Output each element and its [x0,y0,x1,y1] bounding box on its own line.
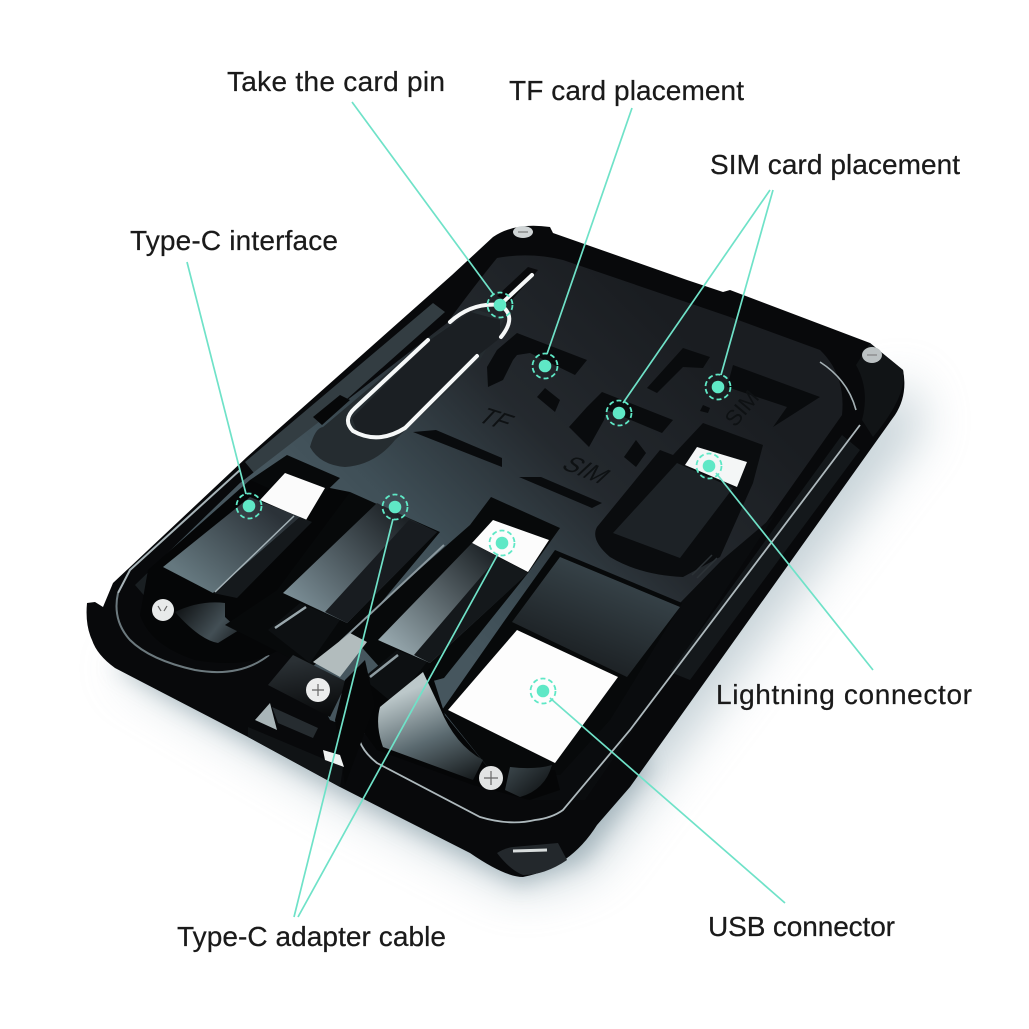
left grey gap [255,703,277,730]
dark side [325,520,437,623]
neck [268,603,340,663]
clip block [268,655,347,717]
SIM top slot [569,392,673,447]
SIM card slot [519,392,673,508]
ridges [692,555,717,578]
card tool kit body [87,226,904,877]
corner tab right [856,343,904,437]
screw centre [306,678,330,702]
first Type-C adapter cable [225,492,440,668]
line: adapter cable right [298,554,498,917]
line: USB connector [550,698,785,903]
label: Type-C adapter cable: Type-C adapter cable [177,921,446,952]
marker: cable one [382,494,408,520]
line: Lightning connector [716,473,873,670]
label: USB connector: USB connector [708,911,895,942]
recess [225,492,440,668]
marker: TF [532,354,558,378]
tiny notch [700,405,710,413]
black side slot [313,395,350,425]
drop shadow under the card [110,380,925,890]
recess [442,550,682,775]
sim pin [348,275,532,437]
corner tab bottom [497,843,567,875]
screw left [152,599,174,621]
rim highlight top right [820,362,856,410]
body [613,463,733,558]
dark side [213,517,312,598]
lobe right of screw [505,765,552,797]
lower right black cavity [340,668,560,800]
base plate [248,727,343,787]
lower left lobe [175,602,239,643]
marker: SIM right [706,374,730,400]
label: TF card placement: TF card placement [509,75,744,106]
TF top slot [487,333,587,387]
rim highlight left [118,470,240,593]
dark side [414,557,528,663]
TF card slot [413,333,587,467]
neck highlight [275,607,306,628]
white tip [685,447,747,487]
label: Lightning connector: Lightning connector [716,679,972,710]
white latch [323,750,344,767]
white tip [260,473,325,520]
recess [250,455,340,507]
slot corner [647,348,710,393]
line: SIM card placement right [721,190,773,375]
Type-C interface adapter [163,455,340,598]
SIM label: SIM [555,452,616,488]
pin loop interior [352,312,500,436]
marker: cable two [490,530,514,556]
screws [152,226,882,790]
screw top [513,226,533,238]
recess [348,497,560,690]
rim band left [135,483,256,600]
black area right of USB [530,515,775,800]
neck [363,650,427,705]
pin recess [310,310,505,467]
highlight [215,516,294,592]
black channel [335,660,375,785]
lower right lobe [378,672,483,780]
second SIM card slot [647,348,820,431]
label: Take the card pin: Take the card pin [227,66,445,97]
body [283,503,437,623]
marker: Type-C interface [236,494,262,518]
light strip [313,633,367,677]
body [378,543,528,663]
screw right [862,347,882,363]
marker: pin [488,292,512,318]
TF card lower slot [413,430,502,467]
screw bottom [479,766,503,790]
Lightning connector [595,423,763,578]
rim highlight lower right [357,425,860,822]
line: take the card pin [352,102,494,295]
slot bar [727,365,820,427]
right side rim [670,435,860,680]
white tip [472,520,549,572]
line: TF card placement [547,108,632,354]
upper body [512,557,680,677]
line: Type-C interface [187,262,246,494]
white plug [448,630,618,763]
recess [595,423,763,577]
TF key notch [537,388,560,412]
SIM label rotated: SIM [720,385,764,431]
label: Type-C interface: Type-C interface [130,225,338,256]
tab glint [513,850,547,851]
centre clip [248,633,375,787]
lower left black cavity [140,480,350,663]
TF label: TF [472,404,520,435]
callout markers [236,292,730,704]
second Type-C adapter cable [340,497,560,705]
SIM lower slot [519,477,602,508]
marker: USB [530,678,556,704]
rim highlight lower left [116,593,269,672]
tray surface [150,255,843,790]
line: adapter cable left [294,519,393,917]
body [163,497,300,593]
line: SIM card placement left [623,190,770,403]
lower clip [272,707,318,738]
SIM key notch [624,440,646,467]
USB connector [442,550,682,775]
callout lines [187,102,873,917]
rail highlight [340,545,444,642]
pin slot [497,267,538,302]
marker: Lightning [696,454,722,478]
neck highlight [370,655,398,677]
marker: SIM left [606,400,632,426]
outer black shell [87,226,904,877]
label: SIM card placement: SIM card placement [710,149,960,180]
rim strip left [245,303,445,478]
